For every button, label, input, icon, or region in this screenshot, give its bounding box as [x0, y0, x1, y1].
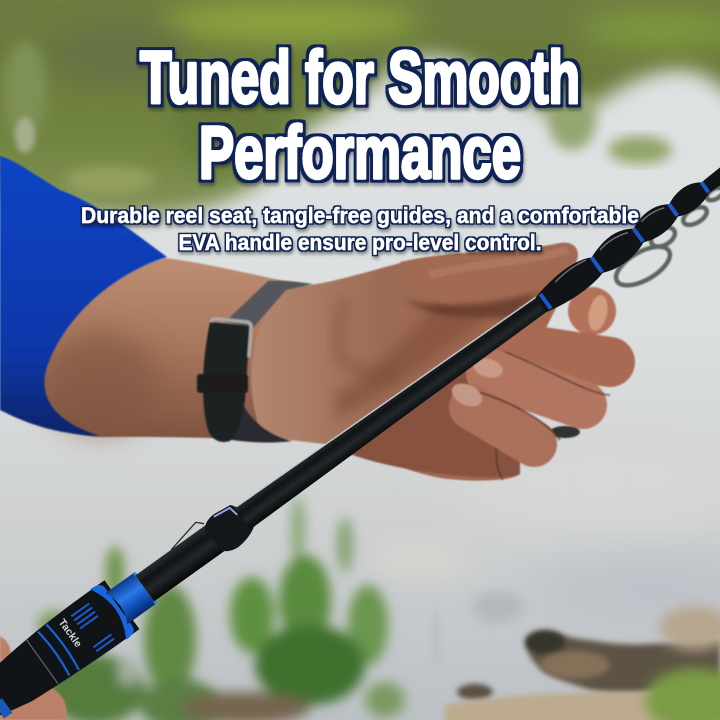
rod handle [0, 580, 139, 720]
seat stripes [71, 604, 114, 651]
subtitle [81, 203, 639, 255]
rod guides [610, 185, 720, 293]
blue wraps [540, 180, 710, 309]
lower rod section [135, 523, 227, 601]
handle detail: dark grip band [27, 640, 58, 684]
hook keeper [167, 519, 205, 550]
tip highlights [554, 204, 664, 285]
thumb [400, 243, 578, 305]
palm crease [496, 440, 503, 480]
shoreline rocks and bank [445, 606, 720, 720]
butt cap [0, 698, 12, 718]
telescoping tip sections [532, 156, 720, 317]
title [140, 36, 580, 194]
foliage: left plant [37, 546, 220, 720]
little finger [448, 379, 560, 444]
blue ferrule [105, 571, 158, 624]
lower palm shadow [340, 340, 520, 477]
subtitle: EVA handle ensure pro-level control. [178, 230, 542, 255]
shadow beneath thumb [405, 292, 540, 318]
middle finger [515, 348, 610, 362]
winding check [201, 500, 258, 557]
blue flange [90, 582, 137, 640]
forearm shadow [42, 330, 158, 434]
lower strap tail [232, 396, 292, 443]
shade above rod [335, 300, 490, 420]
main rod blank [234, 290, 553, 530]
wrist crease shadow [337, 300, 395, 373]
palm and wrist [251, 251, 560, 481]
hand gripping rod base [0, 636, 67, 720]
forearm [42, 258, 340, 439]
foliage: centre plant [180, 496, 405, 720]
blue sleeve [0, 156, 167, 436]
ring finger [471, 352, 610, 405]
buckle [211, 319, 251, 357]
black strap [203, 322, 250, 442]
keeper loop [197, 374, 248, 393]
subtitle: Durable reel seat, tangle-free guides, and a comfortable [81, 203, 639, 228]
title: Performance [199, 111, 521, 194]
watch strap [197, 281, 313, 443]
brand text: Tackle [56, 617, 84, 650]
handle stripes [37, 623, 81, 676]
dark object behind fingers [550, 426, 580, 438]
upper grey strap [225, 281, 313, 328]
rod highlight [236, 291, 540, 510]
hand [251, 243, 616, 481]
index fingertip [568, 287, 616, 335]
thumb highlight [430, 250, 568, 275]
